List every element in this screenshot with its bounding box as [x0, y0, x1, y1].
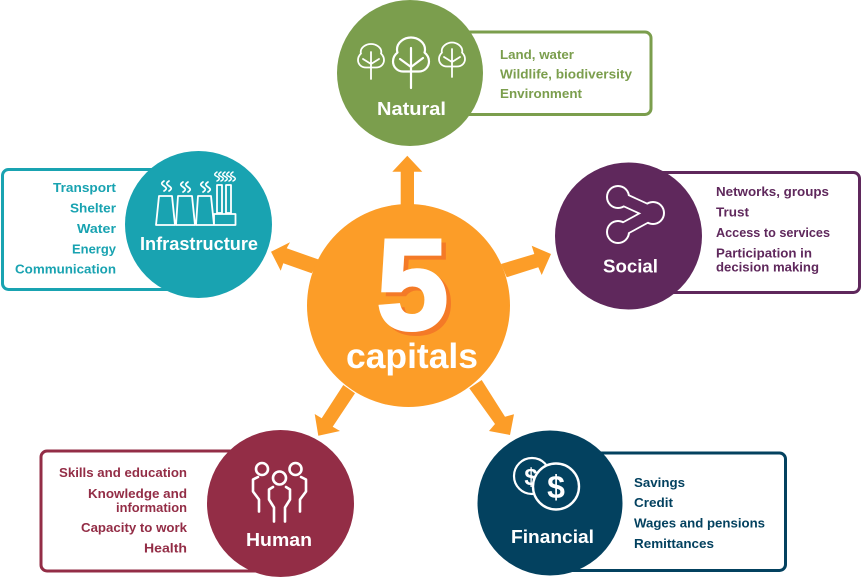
- big number: 5: [377, 214, 448, 357]
- financial label: Financial: [511, 527, 594, 547]
- infrastructure list text: Water: [77, 221, 116, 236]
- panel: center 5 capitals: [271, 156, 551, 436]
- human list text: [59, 465, 188, 556]
- infrastructure label: Infrastructure: [140, 234, 258, 254]
- icon: coins: [514, 458, 579, 510]
- human list text: Knowledge and: [88, 486, 187, 501]
- financial list text: Remittances: [634, 536, 714, 551]
- human list box: [41, 451, 261, 571]
- social list text: Networks, groups: [716, 184, 829, 199]
- natural list box: [440, 32, 651, 114]
- infrastructure list text: Communication: [15, 262, 116, 276]
- natural list text: Land, water: [500, 47, 574, 62]
- natural list text: Environment: [500, 86, 583, 101]
- human list text: Health: [144, 540, 187, 556]
- icon: coins: $: [547, 469, 565, 505]
- panel: human: [41, 430, 354, 577]
- infrastructure circle: [125, 151, 272, 298]
- arrow: to infrastructure: [271, 242, 320, 273]
- social circle: [555, 162, 702, 310]
- infrastructure list text: Shelter: [70, 200, 116, 216]
- social list text: Trust: [716, 204, 750, 220]
- icon: coins: $: [524, 464, 538, 491]
- social list text: decision making: [716, 260, 819, 274]
- human label: Human: [246, 530, 312, 550]
- natural circle: [337, 0, 483, 146]
- icon: power plant: [156, 172, 236, 225]
- social list text: Access to services: [716, 225, 830, 240]
- arrow: to human: [315, 385, 355, 436]
- financial list text: Savings: [634, 475, 685, 490]
- financial list text: [634, 475, 765, 551]
- big number shadow: 5: [381, 218, 453, 361]
- social list text: [716, 184, 830, 274]
- human list text: Skills and education: [59, 465, 187, 480]
- social list box: [640, 172, 860, 292]
- panel: infrastructure: [2, 151, 272, 298]
- panel: natural: [337, 0, 651, 146]
- financial list text: Credit: [634, 495, 674, 510]
- icon: share nodes: [606, 185, 665, 244]
- infrastructure list box: [2, 170, 192, 290]
- human list text: Capacity to work: [81, 520, 188, 535]
- natural list text: [500, 47, 633, 101]
- infrastructure list text: [15, 180, 117, 276]
- infrastructure list text: Transport: [53, 180, 117, 195]
- human list text: information: [116, 500, 187, 515]
- arrow: to financial: [469, 380, 514, 435]
- icon: trees: [358, 38, 465, 88]
- social list text: Participation in: [716, 246, 812, 260]
- natural label: Natural: [377, 99, 446, 119]
- infrastructure list text: Energy: [72, 242, 117, 256]
- financial circle: [478, 430, 622, 576]
- financial list text: Wages and pensions: [634, 516, 765, 530]
- arrow: to social: [501, 246, 551, 277]
- human circle: [207, 430, 354, 577]
- capitals label: capitals: [346, 337, 478, 376]
- financial list box: [540, 453, 786, 570]
- social label: Social: [603, 256, 658, 276]
- natural list text: Wildlife, biodiversity: [500, 66, 633, 82]
- arrow: to natural: [392, 156, 422, 210]
- panel: financial: [478, 430, 786, 576]
- icon: people: [253, 463, 306, 522]
- center circle: [307, 204, 510, 407]
- panel: social: [555, 162, 860, 310]
